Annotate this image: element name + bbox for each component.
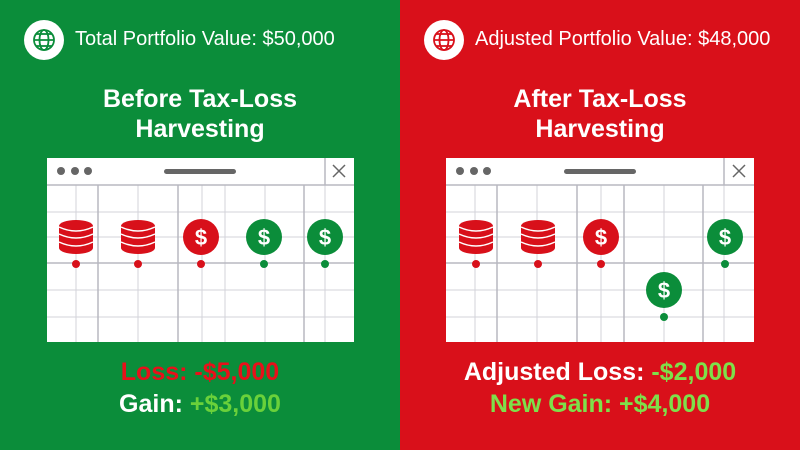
chart window: $	[195, 225, 207, 250]
title	[513, 85, 687, 143]
chart window	[47, 158, 354, 342]
header: total portfolio: Total Portfolio Value: $50,000	[75, 28, 335, 50]
icon: database stacks	[459, 220, 555, 254]
icon: globe	[24, 20, 64, 60]
loss/gain text	[119, 358, 281, 418]
chart window: $	[319, 225, 331, 250]
chart window: $	[719, 225, 731, 250]
loss/gain text: Loss: -$5,000	[121, 358, 279, 386]
adjusted loss/gain text: Adjusted Loss: -$2,000	[464, 358, 736, 386]
chart window: $	[595, 225, 607, 250]
icon: dollar coins	[583, 219, 619, 255]
header: adjusted portfolio: Adjusted Portfolio Value: $48,000	[475, 28, 770, 50]
title	[103, 85, 297, 143]
panel: after	[400, 0, 800, 450]
adjusted loss/gain text: New Gain: +$4,000	[490, 390, 710, 418]
adjusted loss/gain text	[464, 358, 736, 418]
title: Harvesting	[135, 115, 265, 143]
title: Harvesting	[535, 115, 665, 143]
panel: before	[0, 0, 400, 450]
header: adjusted portfolio	[424, 20, 770, 60]
icon: dollar coins	[183, 219, 219, 255]
title: After Tax-Loss	[513, 85, 687, 113]
chart window: $	[258, 225, 270, 250]
loss/gain text: Gain: +$3,000	[119, 390, 281, 418]
chart window	[446, 158, 754, 342]
icon: globe	[424, 20, 464, 60]
chart window: $	[658, 278, 670, 303]
header: total portfolio	[24, 20, 335, 60]
icon: database stacks	[59, 220, 155, 254]
title: Before Tax-Loss	[103, 85, 297, 113]
